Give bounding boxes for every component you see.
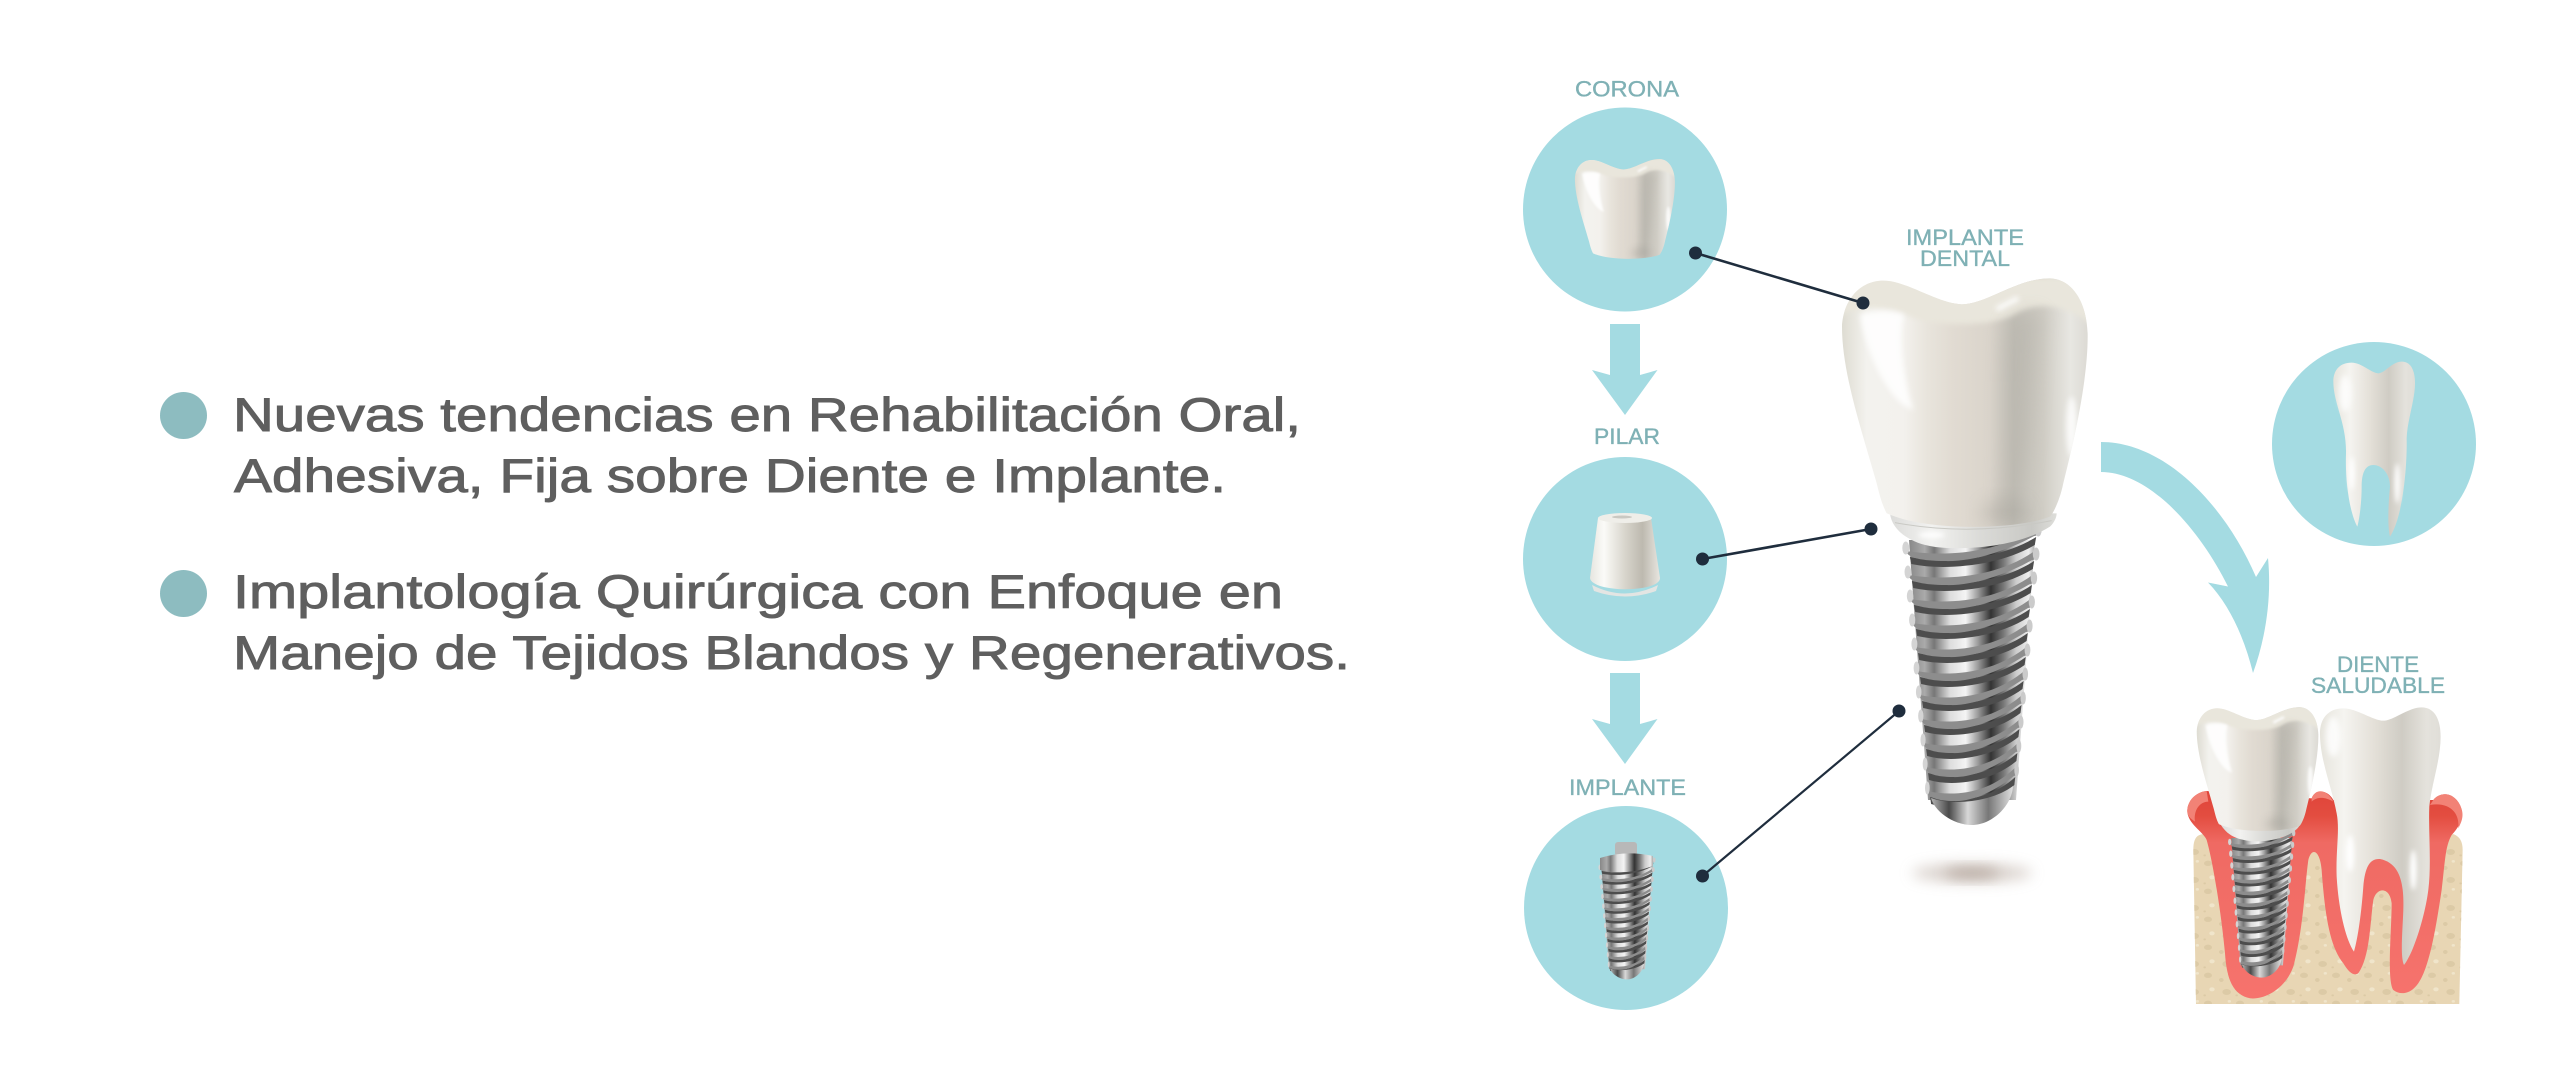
natural tooth bbox=[2320, 707, 2441, 965]
crown bbox=[1837, 277, 2093, 527]
label: implante dental bbox=[1906, 225, 2024, 271]
implant screw bbox=[1902, 524, 2042, 825]
icon: tooth bbox=[2333, 362, 2415, 537]
illustration: teeth in bone bbox=[2187, 706, 2463, 1004]
label: corona: CORONA bbox=[1575, 76, 1679, 102]
label: pilar: PILAR bbox=[1594, 424, 1660, 449]
bullet text 1 bbox=[233, 388, 1301, 502]
label: implante: IMPLANTE bbox=[1569, 775, 1686, 800]
label: diente saludable: DIENTE bbox=[2337, 652, 2419, 677]
icon: small crown bbox=[1573, 158, 1677, 259]
gum bbox=[2187, 791, 2463, 998]
arrow: corona to pilar bbox=[1592, 324, 1658, 415]
bone bbox=[2193, 834, 2463, 1004]
bullet text 1: Adhesiva, Fija sobre Diente e Implante. bbox=[234, 449, 1226, 502]
implant in gum bbox=[2228, 830, 2295, 978]
leader line: implante bbox=[1696, 704, 1906, 882]
label: diente saludable: SALUDABLE bbox=[2311, 673, 2445, 698]
illustration: main implant bbox=[1837, 277, 2093, 825]
icon: small implant bbox=[1598, 842, 1656, 979]
leader line: corona bbox=[1689, 246, 1870, 310]
arrow: pilar to implante bbox=[1592, 673, 1658, 764]
implant crown bbox=[2194, 706, 2321, 831]
panel: corona circle bbox=[1523, 108, 1727, 312]
icon: abutment bbox=[1590, 513, 1660, 596]
panel: healthy tooth circle bbox=[2272, 342, 2476, 546]
bullet text 2 bbox=[233, 565, 1350, 679]
label: diente saludable bbox=[2311, 652, 2445, 698]
label: implante dental: DENTAL bbox=[1920, 246, 2010, 271]
bullet marker 2 bbox=[160, 570, 207, 617]
shadow under implant bbox=[1912, 864, 2032, 882]
bullet list bbox=[160, 388, 1350, 679]
panel: pilar circle bbox=[1523, 457, 1727, 661]
leader line: pilar bbox=[1696, 522, 1878, 566]
implant collar bbox=[2220, 823, 2301, 841]
label: implante dental: IMPLANTE bbox=[1906, 225, 2024, 250]
bullet text 2: Implantología Quirúrgica con Enfoque en bbox=[233, 565, 1283, 618]
bullet marker 1 bbox=[160, 392, 207, 439]
jaw: bone and gum bbox=[2187, 791, 2463, 1004]
abutment collar bbox=[1890, 513, 2057, 548]
bullet text 1: Nuevas tendencias en Rehabilitación Oral, bbox=[233, 388, 1301, 441]
arrow: curved bbox=[2101, 442, 2269, 673]
bullet text 2: Manejo de Tejidos Blandos y Regenerativos. bbox=[233, 626, 1350, 679]
panel: implante circle bbox=[1524, 806, 1728, 1010]
